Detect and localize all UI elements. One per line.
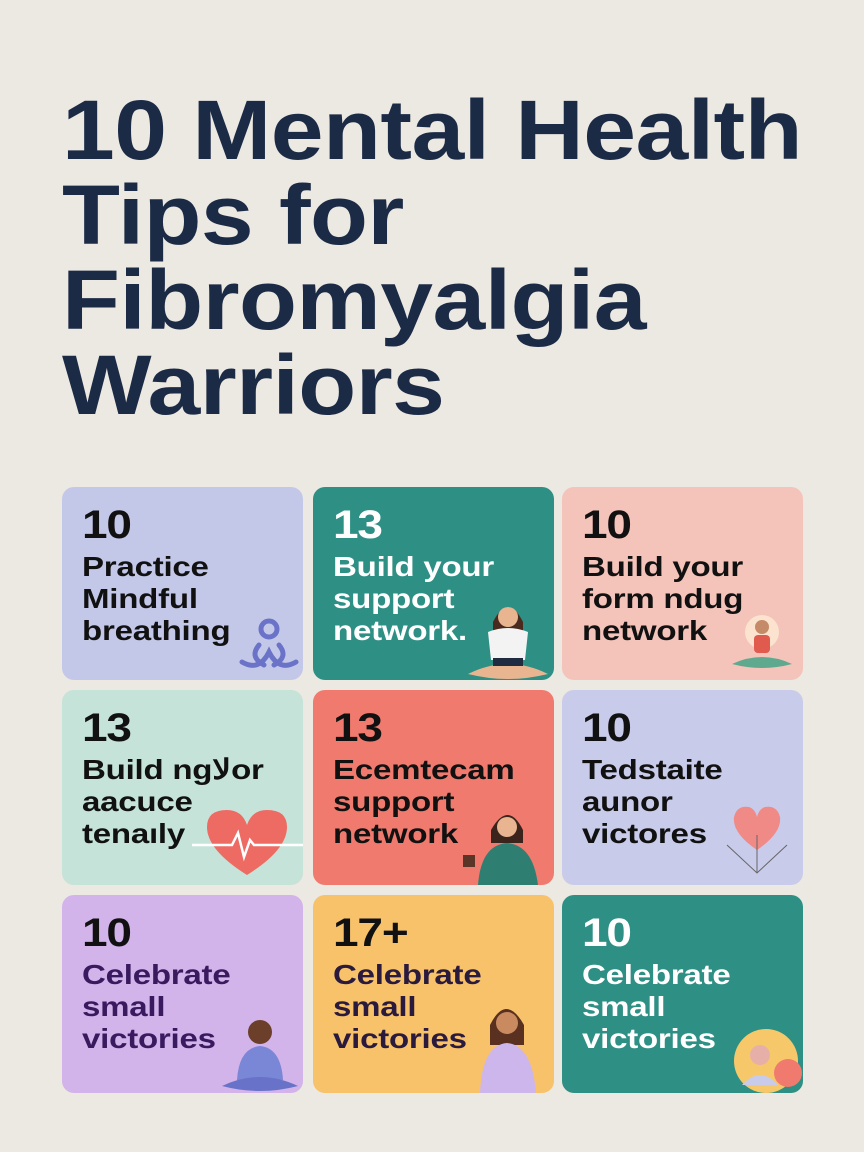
icon: heart with pulse: [192, 810, 303, 875]
card 9: victories: [582, 1023, 716, 1054]
card 5: [313, 690, 554, 885]
card 6: 10: [582, 706, 631, 750]
card 9: [562, 895, 803, 1093]
card 3: Build your: [582, 551, 743, 582]
card 6: aunor: [582, 786, 673, 817]
card 3: form ndug: [582, 583, 743, 614]
card 9: small: [582, 991, 665, 1022]
card 2: support network: [313, 487, 554, 680]
card 8: victories: [333, 1023, 467, 1054]
icon: woman meditating: [468, 607, 548, 679]
icon: circle portrait: [734, 1029, 802, 1093]
icon: woman with mug: [480, 1009, 536, 1093]
card 4: aacuce: [82, 786, 193, 817]
card 1: mindful breathing: [62, 487, 303, 680]
card 3: 10: [582, 503, 631, 547]
card 1: mindful breathing: Mindful: [82, 583, 198, 614]
title: Tips for: [62, 168, 404, 262]
card 5: network: [333, 818, 458, 849]
card 9: Celebrate: [582, 959, 730, 990]
card 8: small: [333, 991, 416, 1022]
card 5: Ecemtecam: [333, 754, 515, 785]
card 2: support network: network.: [333, 615, 467, 646]
icon: meditating person: [222, 1020, 298, 1091]
title: [62, 83, 802, 432]
card 1: mindful breathing: breathing: [82, 615, 230, 646]
icon: woman with cup: [463, 815, 538, 885]
card 7: victories: [82, 1023, 216, 1054]
card 2: support network: Build your: [333, 551, 494, 582]
title: Fibromyalgia: [62, 253, 646, 347]
card 1: mindful breathing: 10: [82, 503, 131, 547]
card 8: 17+: [333, 911, 408, 955]
card 6: [562, 690, 803, 885]
card 7: 10: [82, 911, 131, 955]
card 5: 13: [333, 706, 382, 750]
card 3: [562, 487, 803, 680]
card 9: 10: [582, 911, 631, 955]
card 6: Tedstaite: [582, 754, 722, 785]
title: Warriors: [62, 338, 444, 432]
card 2: support network: 13: [333, 503, 382, 547]
card 8: [313, 895, 554, 1093]
card 6: victores: [582, 818, 707, 849]
card 7: small: [82, 991, 165, 1022]
card 4: Build ngﻻor: [82, 754, 264, 785]
card 4: [62, 690, 303, 885]
card 5: support: [333, 786, 454, 817]
title: 10 Mental Health: [62, 83, 802, 177]
card 8: Celebrate: [333, 959, 481, 990]
card 7: Celebrate: [82, 959, 230, 990]
card 7: [62, 895, 303, 1093]
card 3: network: [582, 615, 707, 646]
card 4: tenaıly: [82, 818, 185, 849]
card 2: support network: support: [333, 583, 454, 614]
card 4: 13: [82, 706, 131, 750]
card 1: mindful breathing: Practice: [82, 551, 209, 582]
icon: meditating figure: [732, 615, 792, 668]
icon: heart: [726, 806, 788, 874]
icon: meditation: [240, 618, 298, 668]
